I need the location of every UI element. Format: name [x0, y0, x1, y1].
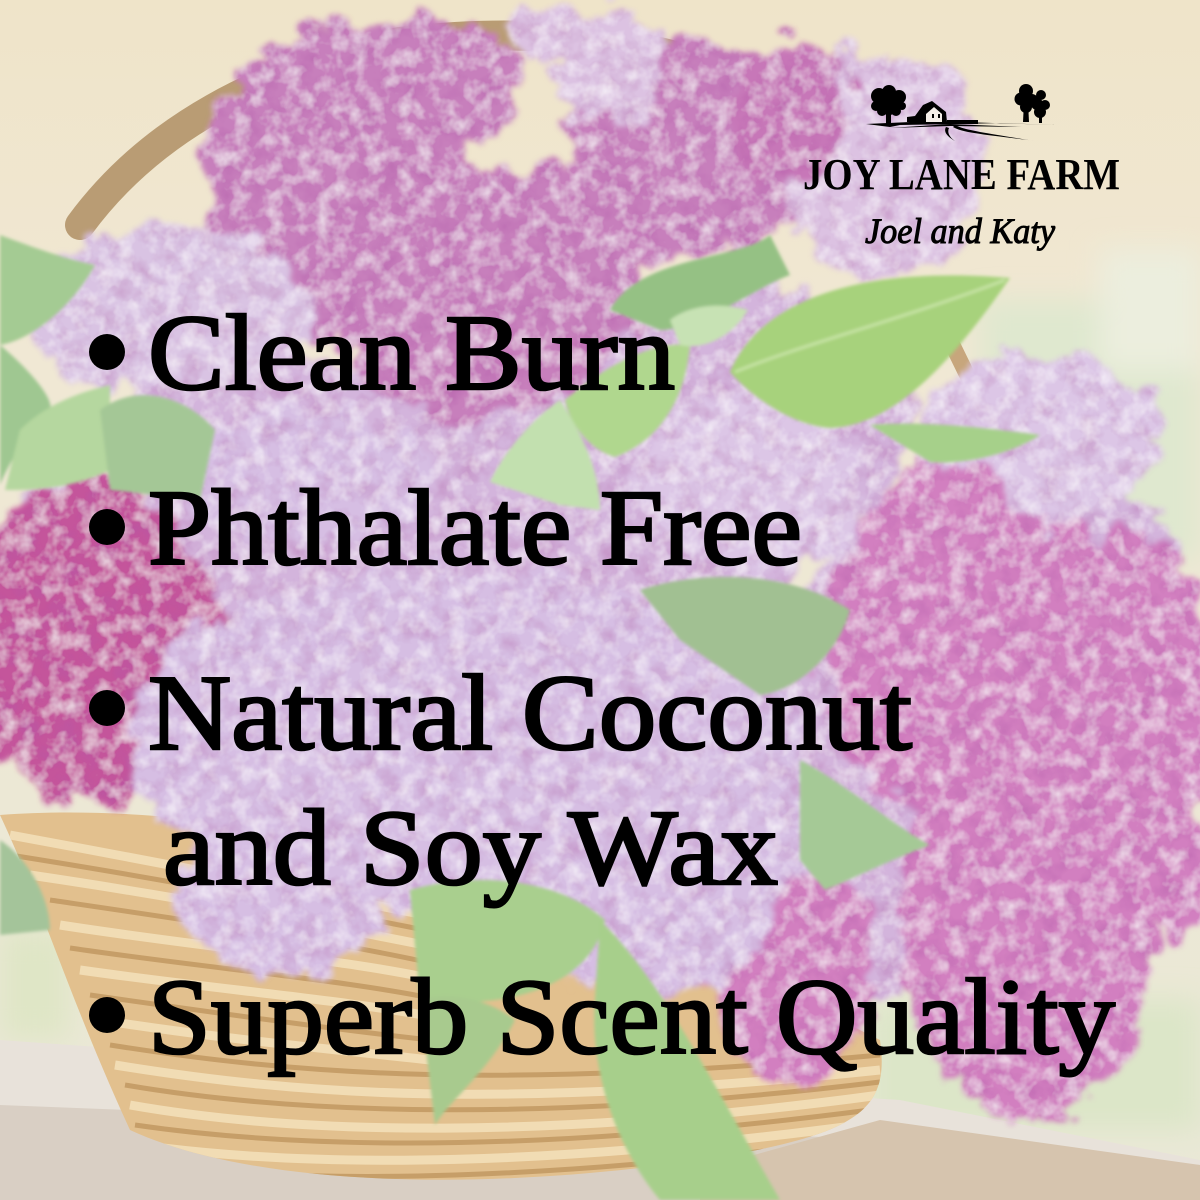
benefits bullet list: [89, 294, 1115, 1077]
left dark magenta cluster: [0, 475, 215, 805]
logo tagline: Joel and Katy: [865, 211, 1055, 251]
top magenta cluster: [205, 15, 815, 415]
basket handle: [80, 36, 972, 385]
bullet: natural coconut and soy wax: and Soy Wax: [163, 789, 778, 908]
bullet: superb scent quality: Superb Scent Quality: [148, 958, 1115, 1077]
logo: Joy Lane Farm: [803, 84, 1120, 251]
right lavender cluster: [635, 350, 1160, 570]
top pale cluster: [515, 5, 980, 280]
right magenta cluster: [705, 465, 1200, 1120]
bullet: clean burn: Clean Burn: [148, 294, 675, 413]
wicker basket: [0, 790, 900, 1190]
bullet: natural coconut and soy wax: Natural Coconut: [148, 654, 912, 773]
icon: farm scene with trees and house: [866, 84, 1056, 141]
logo name: JOY LANE FARM: [803, 150, 1120, 199]
blurred garden background: [0, 250, 1200, 1130]
bullet: phthalate free: Phthalate Free: [148, 469, 802, 588]
wooden table: [0, 1040, 1200, 1200]
leaves: [0, 235, 1040, 1200]
bullet: natural coconut and soy wax: [89, 654, 912, 908]
upper left lavender cluster: [20, 225, 315, 550]
center lavender cluster: [130, 410, 815, 1000]
backing lavender fill: [130, 280, 1180, 1000]
